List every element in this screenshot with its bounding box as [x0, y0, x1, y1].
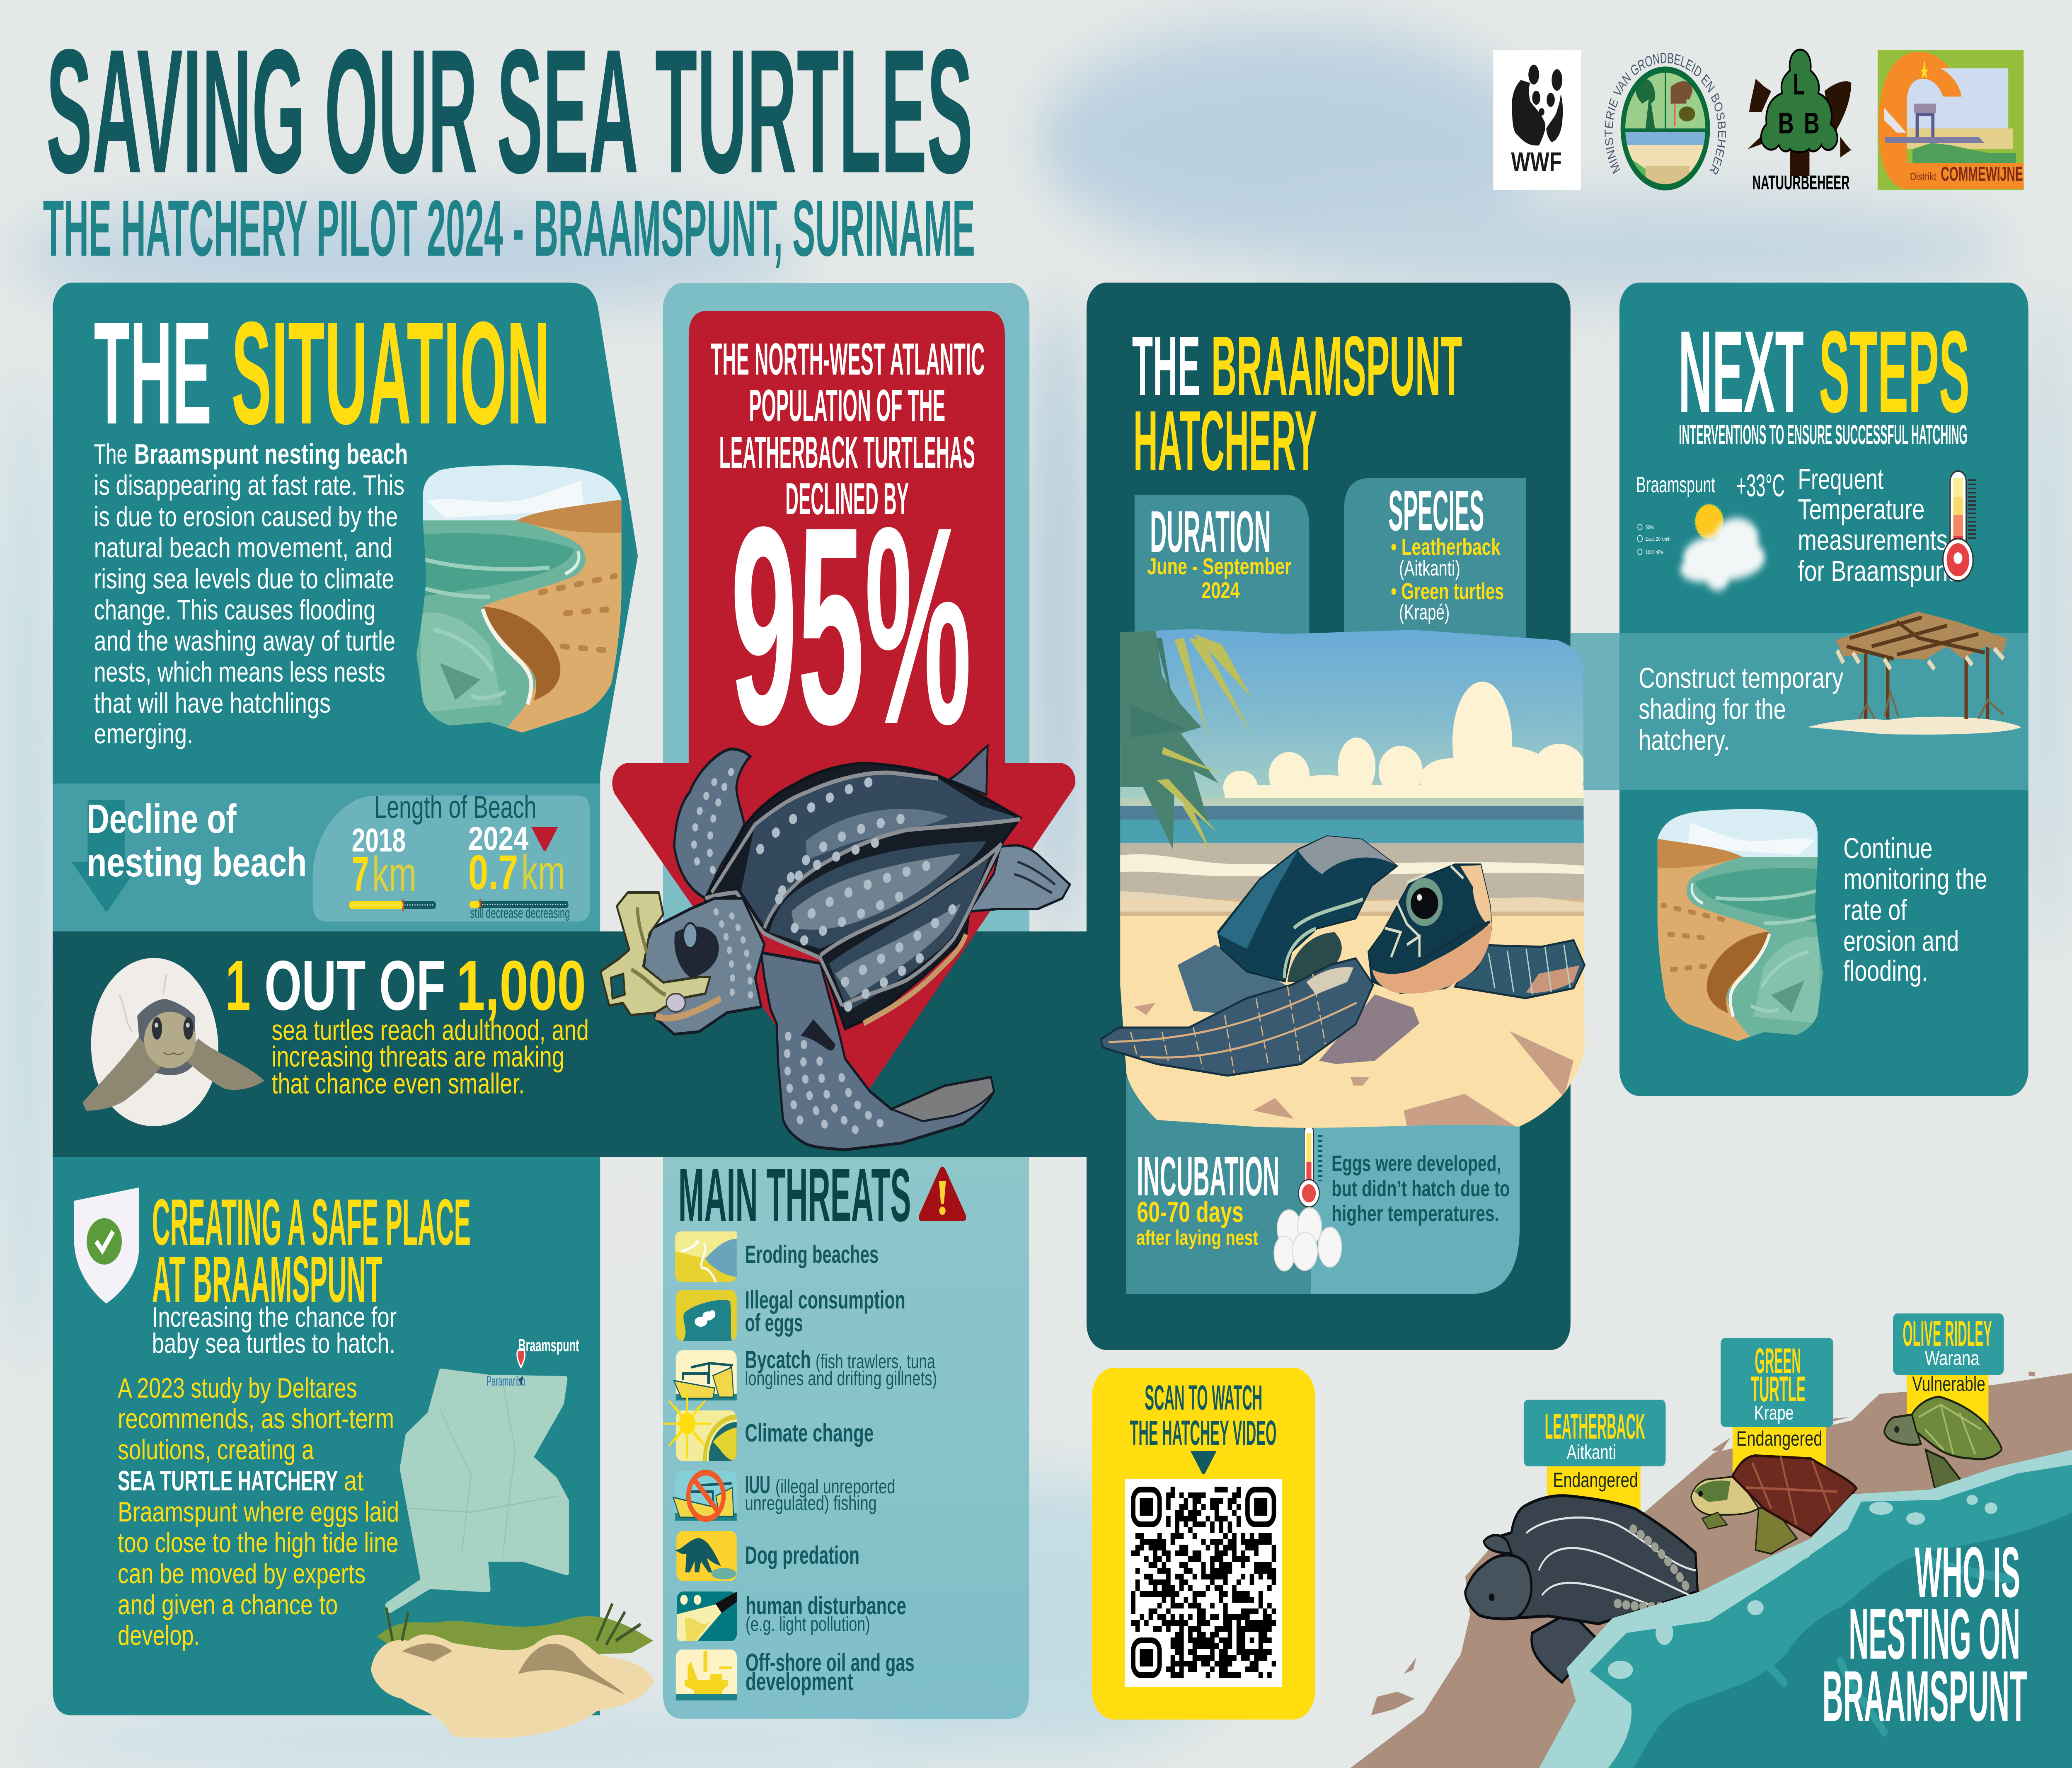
left flipper: [1101, 958, 1373, 1076]
panel: decline of nesting beach: [53, 784, 600, 931]
map: suriname: [387, 1335, 579, 1610]
heading: the situation: [94, 291, 550, 455]
species: leatherback: Aitkanti: [1567, 1441, 1616, 1463]
text: 1 out of 1000: OUT OF: [264, 946, 445, 1025]
band: shading row inner: [1619, 633, 2028, 790]
weather widget: 1010 hPa: [1646, 550, 1663, 555]
species: green turtle: Krape: [1754, 1402, 1794, 1424]
text: frequent temperature measurements: Frequent: [1798, 463, 1883, 496]
threat: climate change: [663, 1392, 874, 1500]
subtitle: THE HATCHERY PILOT 2024 - BRAAMSPUNT, SURINAME: [43, 184, 975, 273]
threat: iuu fishing: IUU: [745, 1471, 770, 1499]
text: deltares study: too close to the high tide line: [118, 1526, 399, 1558]
species: olive ridley: Warana: [1925, 1347, 1980, 1369]
box: species: (Krapé): [1399, 600, 1450, 624]
head and neck: [1368, 864, 1492, 993]
box: incubation: higher temperatures.: [1331, 1202, 1499, 1226]
threat: eroding beaches: Eroding beaches: [745, 1241, 879, 1269]
turtle: leatherback: [1465, 1496, 1698, 1682]
text: decline of nesting beach: Decline of: [87, 796, 237, 842]
text: construct temporary shading: hatchery.: [1639, 724, 1730, 757]
text: decline of nesting beach: [87, 796, 307, 885]
threat: human disturbance: [677, 1591, 906, 1641]
species: leatherback: Endangered: [1553, 1469, 1638, 1492]
text: construct temporary shading: [1639, 662, 1843, 757]
species: green turtle: TURTLE: [1751, 1369, 1806, 1409]
threat: bycatch: longlines and drifting gillnets): [745, 1367, 937, 1390]
shadows: [1178, 945, 1288, 1015]
box: incubation: [1126, 1077, 1520, 1294]
heading: next steps: NEXT: [1678, 306, 1804, 437]
threat: iuu fishing: [673, 1471, 896, 1521]
threat: dog predation: Dog predation: [745, 1542, 859, 1570]
threat: illegal consumption of eggs: [676, 1287, 905, 1341]
text: frequent temperature measurements: measurements: [1798, 524, 1948, 556]
text: population decline: [711, 334, 985, 524]
text: 1 out of 1000: 1: [225, 946, 251, 1025]
threat: eroding beaches: [675, 1231, 879, 1282]
weather widget: [1636, 468, 1785, 590]
heading: creating a safe place: AT BRAAMSPUNT: [152, 1243, 382, 1316]
threat: bycatch: [674, 1346, 937, 1400]
qr code: [1125, 1479, 1282, 1687]
threat: bycatch: Bycatch: [745, 1346, 811, 1374]
species: green turtle: Endangered: [1736, 1427, 1823, 1450]
icon: thermometer: [1943, 471, 1973, 581]
box: species: • Leatherback: [1391, 534, 1501, 560]
text: situation body: nests, which means less nests: [94, 656, 385, 688]
heading: creating a safe place: [152, 1185, 471, 1316]
rear flipper: [969, 845, 1070, 912]
text: continue monitoring: erosion and: [1843, 925, 1959, 958]
map: suriname: Paramaribo: [487, 1374, 525, 1389]
logo: lbb natuurbeheer: L: [1793, 68, 1804, 101]
heading: the situation: SITUATION: [232, 291, 550, 455]
lower flipper: [761, 953, 994, 1150]
threat: offshore oil and gas: development: [746, 1668, 853, 1696]
icon: down triangle: [1191, 1451, 1217, 1474]
panel: next steps: [1571, 283, 2028, 1096]
panel: braamspunt hatchery: [1087, 283, 1571, 1350]
weather widget: 50%: [1646, 525, 1654, 530]
text: situation body: natural beach movement, and: [94, 532, 392, 564]
species: leatherback: [1465, 1400, 1698, 1682]
text: deltares study: and given a chance to: [118, 1589, 338, 1620]
species: green turtle: [1691, 1338, 1857, 1554]
text: deltares study: solutions, creating a: [118, 1434, 314, 1466]
threat: illegal consumption of eggs: of eggs: [745, 1309, 803, 1337]
threat: offshore oil and gas: Off-shore oil and gas: [746, 1649, 915, 1677]
text: deltares study: develop.: [118, 1619, 200, 1651]
panel: main threats: [663, 1154, 1029, 1719]
logo: distrikt commewijne: Distrikt: [1910, 170, 1936, 183]
box: length of beach: 0.7: [468, 845, 518, 900]
text: continue monitoring: rate of: [1843, 894, 1907, 926]
red arrow: 95 percent: [612, 311, 1075, 1125]
text: population decline: LEATHERBACK TURTLEHAS: [719, 427, 975, 478]
text: deltares study: SEA TURTLE HATCHERY: [118, 1465, 338, 1497]
heading: the situation: THE: [94, 291, 212, 455]
text: situation body: rising sea levels due to climate: [94, 563, 394, 595]
heading: who is nesting on braamspunt: [1823, 1532, 2027, 1736]
threat: climate change: Climate change: [745, 1420, 874, 1447]
box: duration: 2024: [1201, 577, 1240, 603]
box: duration: [1135, 495, 1309, 646]
weather widget: +33°C: [1736, 468, 1785, 503]
stat: 95 percent: 95%: [731, 468, 972, 783]
threat: illegal consumption of eggs: Illegal consumption: [745, 1287, 905, 1314]
heading: braamspunt hatchery: [1132, 318, 1462, 488]
head: [643, 898, 764, 1034]
threat: human disturbance: human disturbance: [746, 1592, 906, 1620]
threat: offshore oil and gas: [676, 1649, 915, 1700]
text: deltares study: can be moved by experts: [118, 1558, 366, 1589]
text: deltares study: at: [344, 1465, 364, 1497]
text: population decline: POPULATION OF THE: [749, 380, 945, 431]
text: situation body: is due to erosion caused by the: [94, 501, 398, 532]
text: frequent temperature measurements: Temperature: [1798, 493, 1925, 526]
text: situation body: Braamspunt nesting beach: [134, 438, 408, 470]
text: subtitle: Increasing the chance for: [152, 1301, 397, 1333]
box: length of beach: 7: [352, 847, 369, 902]
species: leatherback: LEATHERBACK: [1545, 1407, 1645, 1446]
text: continue monitoring: monitoring the: [1843, 863, 1987, 895]
carapace: [705, 763, 1020, 1029]
species: olive ridley: [1884, 1313, 2004, 1488]
icon: small thermometer: [1299, 1126, 1320, 1207]
icon: down arrow: [72, 800, 141, 912]
species: green turtle: GREEN: [1755, 1341, 1801, 1381]
box: incubation: Eggs were developed,: [1331, 1151, 1501, 1176]
text: population decline: THE NORTH-WEST ATLANTIC: [711, 334, 985, 385]
text: situation body: that will have hatchlings: [94, 687, 331, 719]
threat: iuu fishing: unregulated) fishing: [745, 1492, 877, 1514]
weather widget: East, 20 km/h: [1646, 537, 1670, 542]
logo: distrikt commewijne: [1878, 50, 2024, 190]
logo: lbb natuurbeheer: [1748, 50, 1852, 194]
icon: eggs: [1274, 1208, 1341, 1271]
band: shading row: [1571, 633, 1619, 790]
box: duration: DURATION: [1150, 499, 1271, 564]
logo: lbb natuurbeheer: B: [1804, 106, 1820, 140]
illustration: eroding beach: [414, 460, 628, 736]
text: situation body: change. This causes flooding: [94, 594, 375, 626]
logo: lbb natuurbeheer: B: [1778, 106, 1794, 140]
text: deltares study: Braamspunt where eggs laid: [118, 1496, 399, 1528]
illustration: sand dune: [371, 1604, 654, 1738]
text: 1 out of 1000: [225, 946, 589, 1100]
box: length of beach: km: [521, 845, 565, 900]
plastic bag: [600, 892, 710, 1015]
text: 1 out of 1000: that chance even smaller.: [272, 1068, 525, 1100]
illustration: eroding beach mirrored: [1652, 804, 1825, 1044]
heading: braamspunt hatchery: HATCHERY: [1133, 393, 1317, 488]
turtle: olive: [1884, 1397, 2002, 1488]
text: population decline: DECLINED BY: [785, 474, 909, 524]
box: length of beach: km: [372, 847, 416, 902]
logo: distrikt commewijne: COMMEWIJNE: [1941, 163, 2023, 185]
title: SAVING OUR SEA TURTLES: [46, 13, 973, 210]
top fin: [949, 746, 988, 795]
logo: lbb natuurbeheer: NATUURBEHEER: [1752, 172, 1849, 194]
logo: ministerie: MINISTERIE VAN GRONDBELEID EN BOSBEHEER: [1602, 49, 1728, 178]
upper left flipper: [674, 749, 750, 898]
threat: human disturbance: (e.g. light pollution): [746, 1613, 870, 1635]
turtle: green: [1691, 1456, 1857, 1554]
right flipper: [1455, 940, 1585, 998]
text: situation body: emerging.: [94, 718, 193, 750]
text: deltares study: [118, 1372, 399, 1651]
icon: shield: [74, 1188, 139, 1304]
text: frequent temperature measurements: [1798, 463, 1954, 588]
heading: main threats: MAIN THREATS: [678, 1154, 911, 1237]
text: subtitle: [152, 1301, 397, 1359]
palm: [1120, 630, 1218, 849]
box: length of beach: Length of Beach: [374, 790, 536, 825]
weather widget: Braamspunt: [1636, 473, 1715, 497]
map: suriname: Braamspunt: [518, 1335, 579, 1355]
panel: the situation: [53, 283, 638, 787]
box: incubation: after laying nest: [1136, 1226, 1259, 1249]
illustration: hatchling in egg: [82, 958, 264, 1126]
threat: bycatch: (fish trawlers, tuna: [816, 1350, 935, 1373]
box: species: [1344, 478, 1526, 646]
text: deltares study: recommends, as short-term: [118, 1403, 394, 1434]
panel: qr code: SCAN TO WATCH: [1145, 1378, 1262, 1417]
text: 1 out of 1000: increasing threats are making: [272, 1041, 564, 1073]
text: continue monitoring: flooding.: [1843, 955, 1928, 987]
shell: [1218, 836, 1397, 982]
threat: dog predation: [674, 1531, 859, 1581]
text: continue monitoring: Continue: [1843, 832, 1933, 865]
box: length of beach: [313, 790, 590, 921]
illustration: leatherback turtle: [600, 746, 1070, 1150]
heading: braamspunt hatchery: BRAAMSPUNT: [1211, 318, 1462, 414]
illustration: green turtle on beach: [1101, 626, 1589, 1135]
text: situation body: [94, 438, 408, 750]
text: continue monitoring: [1843, 832, 1987, 987]
text: situation body: and the washing away of turtle: [94, 625, 395, 657]
text: 1 out of 1000: sea turtles reach adulthood, and: [272, 1014, 589, 1047]
text: deltares study: A 2023 study by Deltares: [118, 1372, 357, 1404]
box: incubation: INCUBATION: [1137, 1145, 1279, 1207]
text: construct temporary shading: shading for the: [1639, 693, 1786, 726]
panel: creating a safe place: [53, 1157, 654, 1738]
box: length of beach: 2024: [468, 820, 529, 857]
text: situation body: is disappearing at fast rate. This: [94, 469, 404, 501]
text: 1 out of 1000: 1,000: [456, 946, 586, 1025]
box: length of beach: 2018: [352, 822, 406, 859]
text: situation body: The: [94, 438, 128, 470]
heading: creating a safe place: CREATING A SAFE PLACE: [152, 1185, 471, 1259]
species: olive ridley: Vulnerable: [1912, 1373, 1985, 1396]
text: construct temporary shading: Construct temporary: [1639, 662, 1843, 694]
text: decline of nesting beach: nesting beach: [87, 840, 307, 885]
panel: qr code: [1092, 1368, 1315, 1720]
logo: wwf: [1493, 50, 1581, 190]
illustration: beach strip: [1351, 1371, 2072, 1768]
box: species: • Green turtles: [1391, 578, 1504, 604]
text: frequent temperature measurements: for Braamspunt: [1798, 555, 1954, 588]
box: incubation: 60-70 days: [1137, 1196, 1244, 1229]
panel: pale teal backing behind red arrow: [663, 283, 1029, 954]
threat: iuu fishing: (illegal unreported: [775, 1475, 896, 1498]
illustration: shade hut: [1807, 612, 2021, 735]
box: species: SPECIES: [1388, 479, 1484, 542]
logo: wwf: WWF: [1511, 148, 1562, 177]
box: length of beach: still decrease decreasing: [470, 906, 570, 921]
heading: braamspunt hatchery: THE: [1132, 318, 1200, 414]
panel: dark band 1 out of 1000: [53, 931, 1095, 1157]
panel: qr code: THE HATCHEY VIDEO: [1130, 1413, 1276, 1452]
box: incubation: but didn’t hatch due to: [1331, 1177, 1510, 1201]
text: subtitle: baby sea turtles to hatch.: [152, 1327, 395, 1359]
box: species: (Aitkanti): [1399, 556, 1460, 580]
icon: warning triangle: [919, 1167, 966, 1221]
box: duration: June - September: [1147, 553, 1291, 579]
illustration: ocean waves: [1539, 1450, 2072, 1768]
